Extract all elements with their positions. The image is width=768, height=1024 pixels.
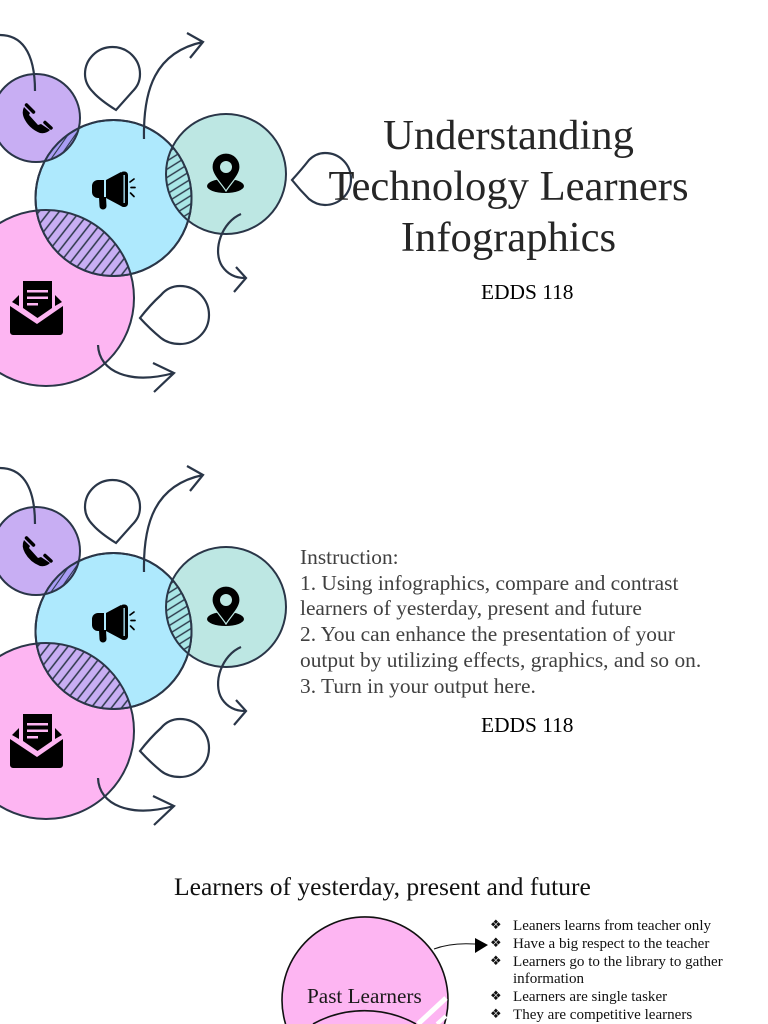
subtitle: first slide: EDDS 118	[481, 280, 574, 304]
overlap: blue and pink	[38, 642, 132, 708]
white highlight stripes	[418, 998, 446, 1024]
instruction text: output by utilizing effects, graphics, and so on.	[300, 648, 701, 672]
overlap: blue and pink	[38, 209, 132, 275]
hand-drawn arrow: up right	[144, 33, 203, 139]
inner circle arc	[313, 1011, 416, 1024]
hand-drawn arrow: bottom	[98, 778, 174, 825]
icon: location pin	[207, 153, 244, 193]
heading: third slide: Learners of yesterday, present and future	[174, 872, 591, 901]
icon: megaphone	[92, 604, 135, 642]
drop outline: bottom	[140, 286, 209, 344]
list: past learners traits: information	[513, 971, 584, 987]
drop outline: top	[85, 480, 140, 543]
icon: open envelope	[10, 281, 63, 335]
instruction text: Instruction:	[300, 545, 399, 569]
hand-drawn arrow: top left	[0, 468, 35, 524]
Venn diagram: past learners circle	[282, 917, 448, 1024]
instruction text: learners of yesterday, present and future	[300, 596, 642, 620]
white highlight stripe: short	[437, 1016, 446, 1024]
hand-drawn arrow: down right	[218, 647, 246, 725]
list: past learners traits: ❖	[490, 918, 502, 933]
hand-drawn arrow: bottom	[98, 345, 174, 392]
cluster graphic: second slide	[0, 466, 286, 825]
instruction text: 2. You can enhance the presentation of your	[300, 622, 675, 646]
list: past learners traits: ❖	[490, 936, 502, 951]
circle: blue	[36, 120, 192, 276]
hand-drawn arrow: top left	[0, 35, 35, 91]
list: past learners traits: Leaners learns from teacher only	[513, 918, 711, 934]
circle: blue	[36, 553, 192, 709]
title: Technology Learners	[328, 163, 689, 210]
label: past learners: Past Learners	[307, 984, 422, 1008]
instruction text: 3. Turn in your output here.	[300, 674, 536, 698]
circle: purple	[0, 507, 80, 595]
list: past learners traits	[490, 918, 723, 1023]
circle: pink	[0, 643, 134, 819]
list: past learners traits: Learners are single tasker	[513, 989, 667, 1005]
drop outline: bottom	[140, 719, 209, 777]
cluster graphic: first slide	[0, 33, 351, 392]
icon: megaphone	[92, 172, 135, 210]
hand-drawn arrow: up right	[144, 466, 203, 572]
arrow: past learners to list	[434, 938, 488, 953]
icon: location pin	[207, 586, 244, 626]
overlap: blue and teal	[165, 147, 190, 221]
list: past learners traits: They are competitive learners	[513, 1007, 692, 1023]
list: past learners traits: ❖	[490, 954, 502, 969]
list: past learners traits: Have a big respect to the teacher	[513, 936, 709, 952]
list: past learners traits: ❖	[490, 1007, 502, 1022]
circle: purple	[0, 74, 80, 162]
icon: phone	[23, 105, 51, 133]
drop outline: right	[292, 153, 351, 205]
list: past learners traits: Learners go to the library to gather	[513, 954, 723, 970]
hand-drawn arrow: down right	[218, 214, 246, 292]
instruction text: 1. Using infographics, compare and contrast	[300, 571, 678, 595]
list: past learners traits: ❖	[490, 989, 502, 1004]
blue circle outline	[36, 553, 192, 709]
blue circle outline	[36, 120, 192, 276]
overlap: purple and blue	[46, 562, 80, 595]
overlap: blue and teal	[165, 580, 190, 654]
drop outline: top	[85, 47, 140, 110]
instruction text	[300, 545, 701, 698]
title: Understanding	[383, 112, 634, 159]
subtitle: second slide: EDDS 118	[481, 713, 574, 737]
circle: pink	[0, 210, 134, 386]
title	[328, 112, 689, 261]
icon: open envelope	[10, 714, 63, 768]
circle: teal	[166, 114, 286, 234]
overlap: purple and blue	[46, 129, 80, 162]
title: Infographics	[401, 214, 616, 261]
icon: phone	[23, 538, 51, 566]
circle: teal	[166, 547, 286, 667]
